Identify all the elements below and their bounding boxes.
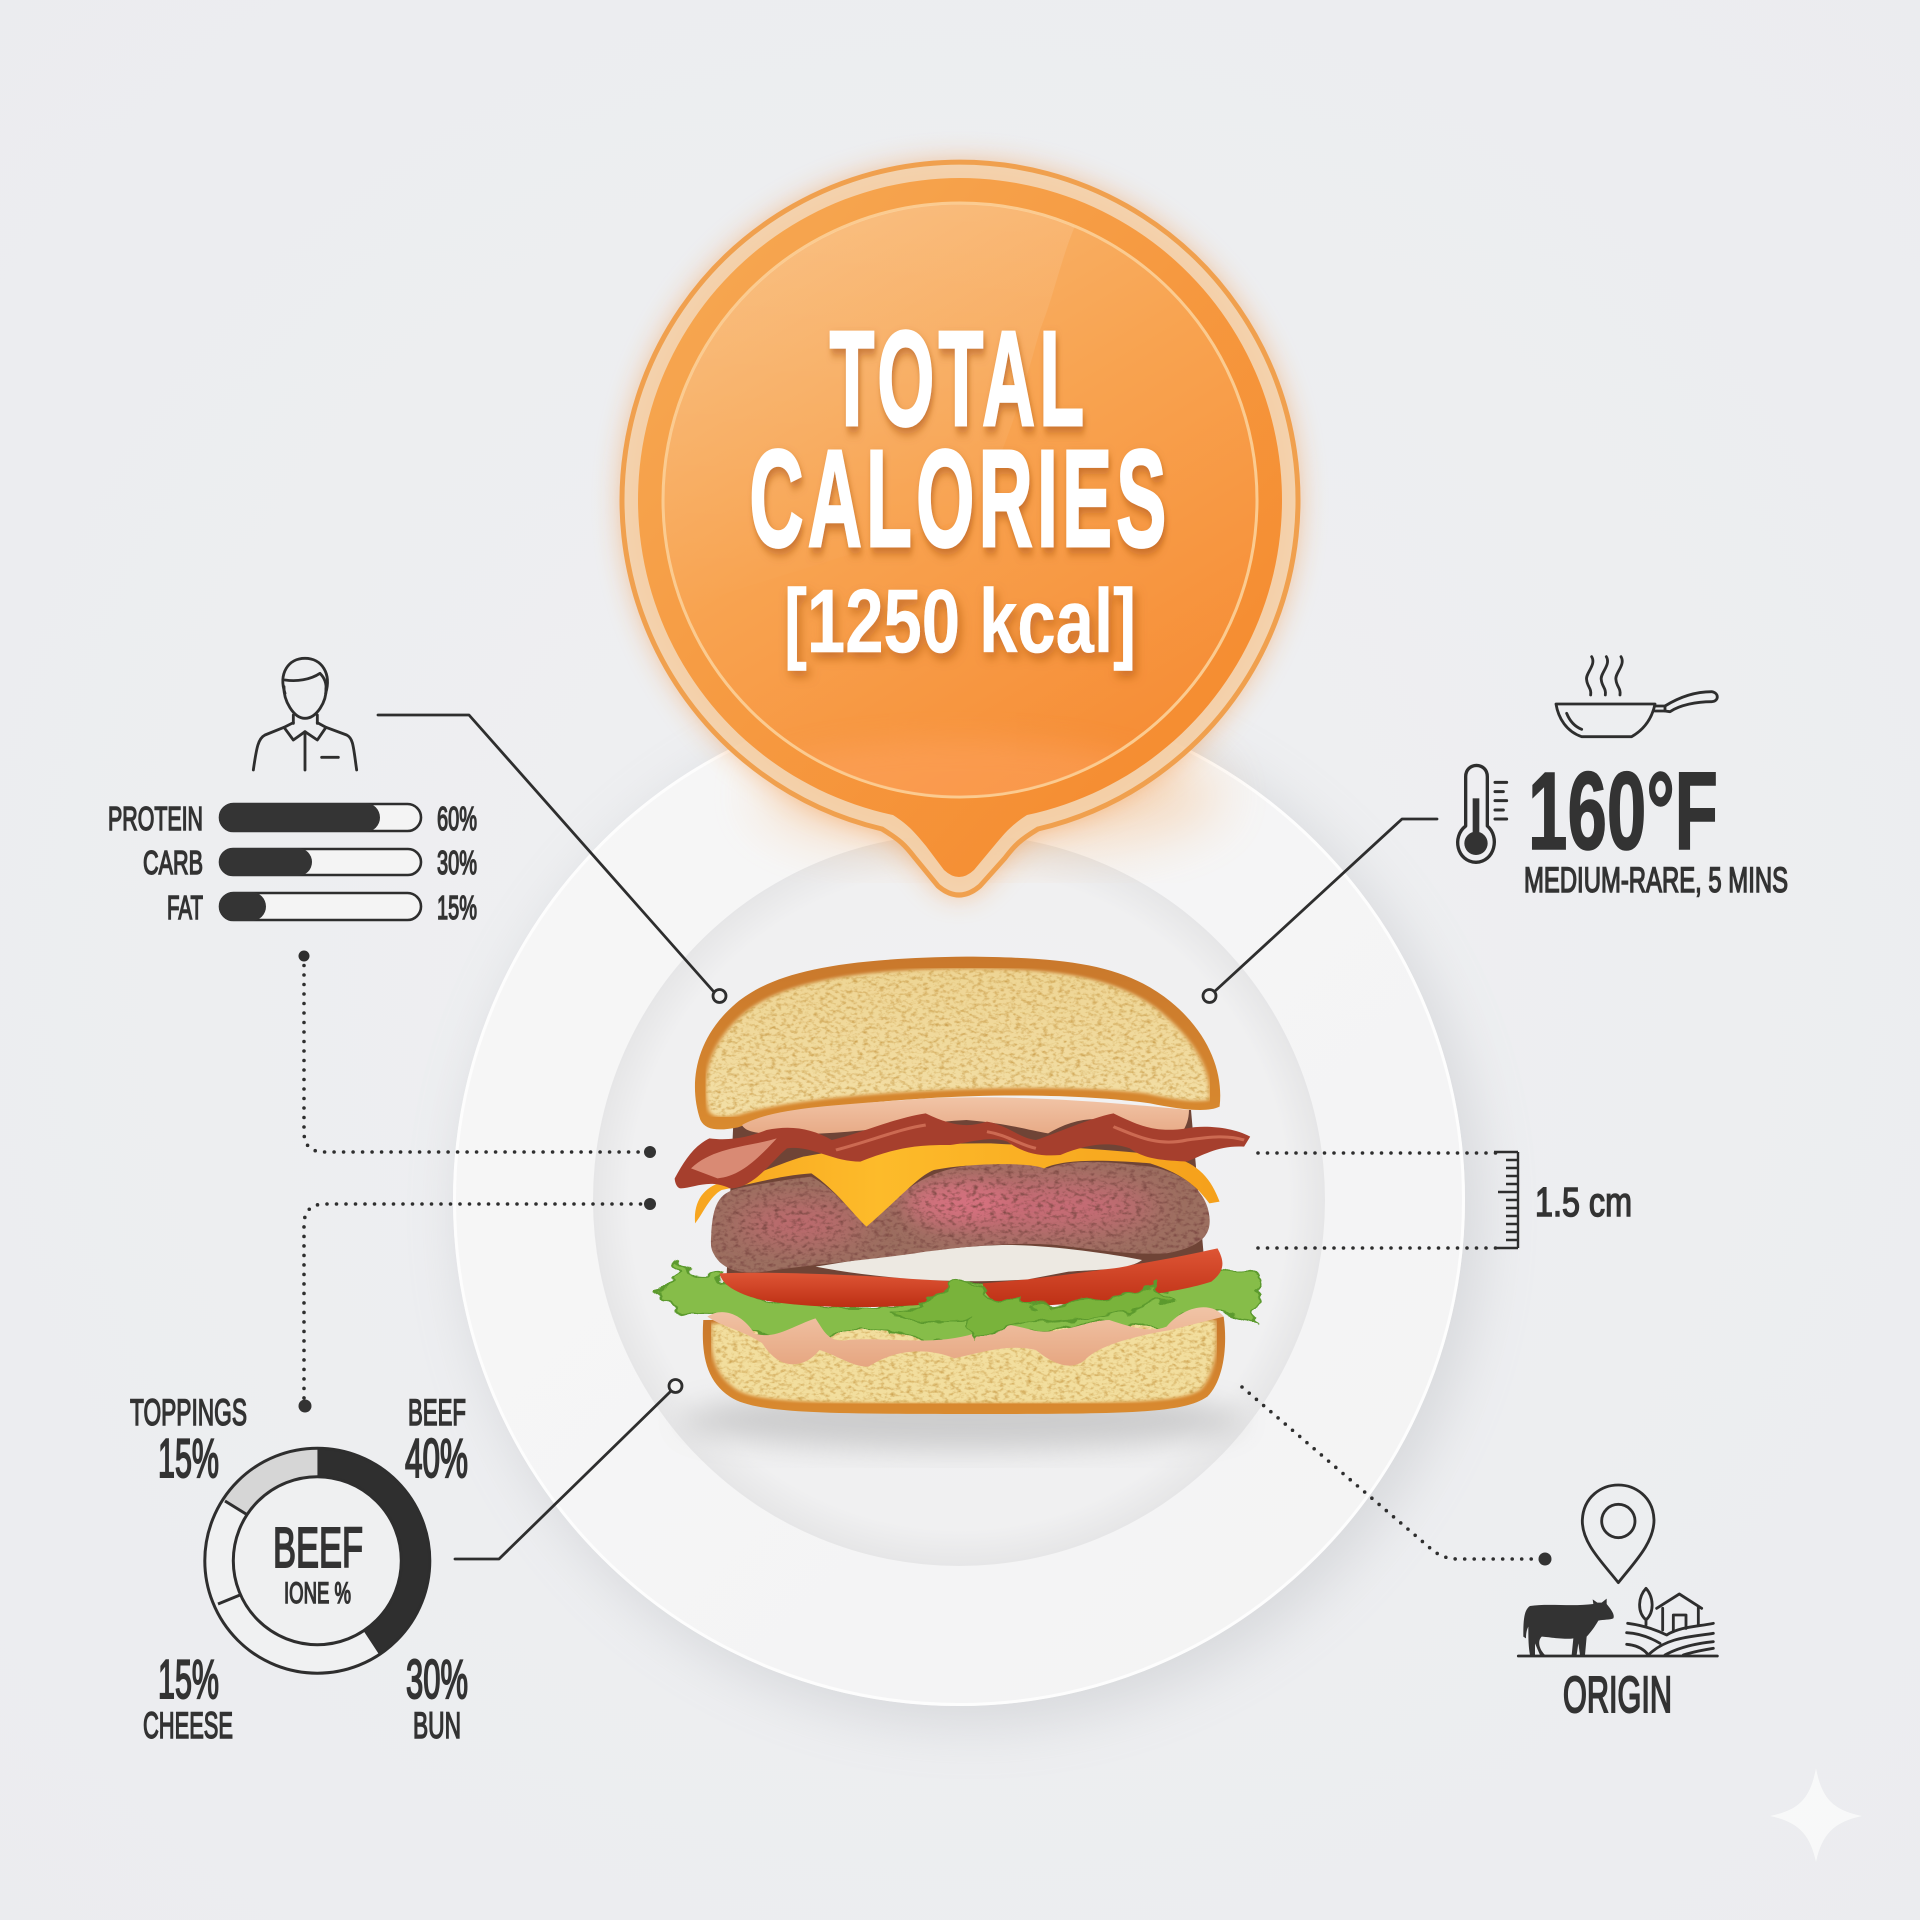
label: bun: BUN [413,1705,461,1746]
leader line: composition to bottom bun [455,1380,682,1559]
burger [660,957,1262,1414]
panel: composition donut [130,1392,468,1746]
panel: origin [1518,1485,1717,1723]
bar: fat [167,889,477,926]
donut chart [205,1448,430,1673]
icon: cow [1518,1599,1717,1656]
bar: carb: 30% [437,844,477,881]
upper sauce [742,1097,1189,1141]
patty thickness measure [1258,1152,1632,1248]
lower sauce [707,1307,1224,1367]
cheese [695,1143,1220,1227]
label: toppings: TOPPINGS [130,1392,247,1433]
top bun [695,957,1220,1129]
plate [453,694,1482,1724]
icon: farm [1627,1588,1713,1655]
panel: cooking [1458,657,1788,900]
label: beef: BEEF [408,1392,466,1433]
bar: protein: 60% [437,800,477,837]
heading: total: TOTAL [830,304,1088,455]
label: toppings: 15% [158,1427,219,1489]
label: beef [405,1392,468,1489]
leader line: cooking to top bun [1203,819,1437,1002]
panel: nutrition [108,658,477,926]
bar: carb [143,844,477,881]
dotted line: nutrition to bacon [298,950,656,1158]
label: bun: 30% [406,1648,468,1710]
bar: carb: CARB [143,844,203,881]
bottom bun [703,1317,1225,1414]
lettuce front leaf [885,1279,1167,1338]
icon: person [253,658,357,770]
donut centre label [273,1516,363,1610]
label: cheese: CHEESE [143,1705,233,1746]
label: beef: 40% [405,1427,468,1489]
bar: protein [108,800,477,837]
cooking note: MEDIUM-RARE, 5 MINS [1524,861,1788,900]
bar: protein: PROTEIN [108,800,203,837]
value: kcal: [1250 kcal] [784,572,1136,672]
icon: frying pan [1556,657,1717,737]
dotted line: patty to composition [298,1198,656,1412]
donut centre label: IONE % [284,1577,351,1610]
onion [816,1245,1142,1281]
callout bubble: total calories [622,162,1298,895]
label: bun [406,1648,468,1746]
dotted line: bottom bun to origin [1242,1387,1552,1566]
donut centre label: BEEF [273,1516,363,1580]
leader line: nutrition to top bun [378,715,726,1002]
icon: location pin [1582,1485,1654,1583]
label: toppings [130,1392,247,1489]
icon: sparkle watermark [1770,1768,1862,1862]
patty [710,1162,1210,1272]
label: cheese: 15% [158,1648,219,1710]
measure label: 1.5 cm [1535,1179,1632,1225]
temperature value: 160°F [1528,750,1718,873]
bar: fat: 15% [437,889,477,926]
heading: calories: CALORIES [749,422,1171,576]
origin label: ORIGIN [1563,1666,1672,1723]
bar: fat: FAT [167,889,203,926]
label: cheese [143,1648,233,1746]
icon: thermometer [1458,765,1507,862]
tomato [720,1248,1222,1308]
burger inner shadow filler [726,1110,1207,1297]
bacon [675,1113,1250,1188]
lettuce [660,1263,1262,1345]
